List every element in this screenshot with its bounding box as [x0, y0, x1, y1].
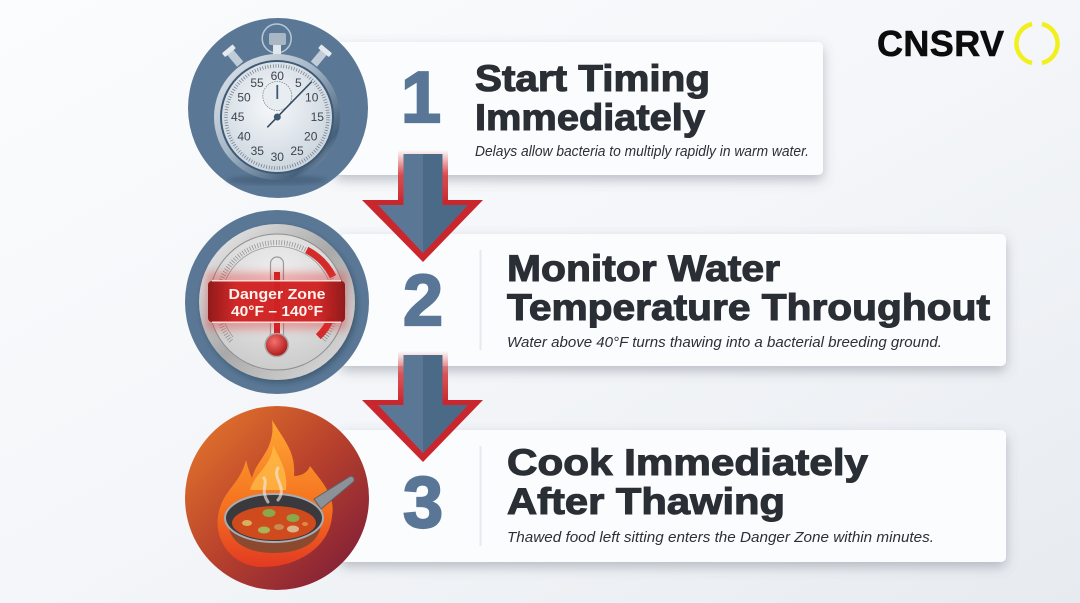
- icon: stopwatch: 60: [271, 69, 284, 83]
- icon: flaming pan: [185, 406, 369, 590]
- step 1 number: 1: [401, 58, 441, 138]
- step 2 heading: Monitor Water: [507, 248, 780, 289]
- step 3 heading: After Thawing: [507, 481, 785, 522]
- step 1 heading: [475, 58, 710, 138]
- panel: step 2: [340, 234, 1006, 366]
- icon: stopwatch: 35: [251, 144, 264, 158]
- step 2 number: 2: [403, 261, 443, 341]
- step 2 heading: [507, 248, 990, 328]
- steam: [264, 468, 281, 502]
- icon: stopwatch: 15: [311, 110, 324, 124]
- panel: step 1: [335, 42, 823, 175]
- logo: CNSRV: CNSRV: [877, 23, 1004, 64]
- icon: stopwatch: 45: [231, 110, 245, 124]
- step 2 heading: Temperature Throughout: [507, 287, 990, 328]
- icon: stopwatch: [188, 18, 368, 198]
- icon: stopwatch: 25: [290, 144, 304, 158]
- icon: stopwatch: 10: [305, 90, 319, 104]
- danger zone label: Danger Zone: [228, 286, 326, 303]
- flame: [217, 420, 333, 567]
- icon: stopwatch: 50: [237, 90, 251, 104]
- icon: stopwatch: 30: [271, 150, 284, 164]
- step 3 card: [340, 430, 1006, 562]
- step 3 description: Thawed food left sitting enters the Danger Zone within minutes.: [507, 529, 934, 546]
- step 3 heading: [507, 442, 868, 522]
- icon: stopwatch: 40: [237, 130, 251, 144]
- icon: temperature gauge with danger zone: [185, 210, 369, 394]
- danger zone label: 40°F – 140°F: [231, 303, 323, 320]
- icon: stopwatch: 55: [250, 76, 264, 90]
- icon: stopwatch: 20: [304, 130, 318, 144]
- step 1 card: [335, 42, 823, 175]
- danger zone label: [228, 286, 326, 320]
- arrow: step 2 to step 3: [362, 351, 483, 462]
- icon: stopwatch: 5: [295, 76, 302, 90]
- pan body: [228, 525, 321, 553]
- pan handle: [314, 476, 354, 509]
- step 1 heading: Immediately: [475, 97, 705, 138]
- step 3 number: 3: [403, 463, 443, 543]
- food: [242, 509, 308, 534]
- step 1 description: Delays allow bacteria to multiply rapidly in warm water.: [475, 143, 809, 160]
- step 3 heading: Cook Immediately: [507, 442, 868, 483]
- step 2 description: Water above 40°F turns thawing into a bacterial breeding ground.: [507, 334, 942, 351]
- panel: step 3: [340, 430, 1006, 562]
- step 1 heading: Start Timing: [475, 58, 710, 99]
- arrow: step 1 to step 2: [362, 150, 483, 262]
- step 2 card: [340, 234, 1006, 366]
